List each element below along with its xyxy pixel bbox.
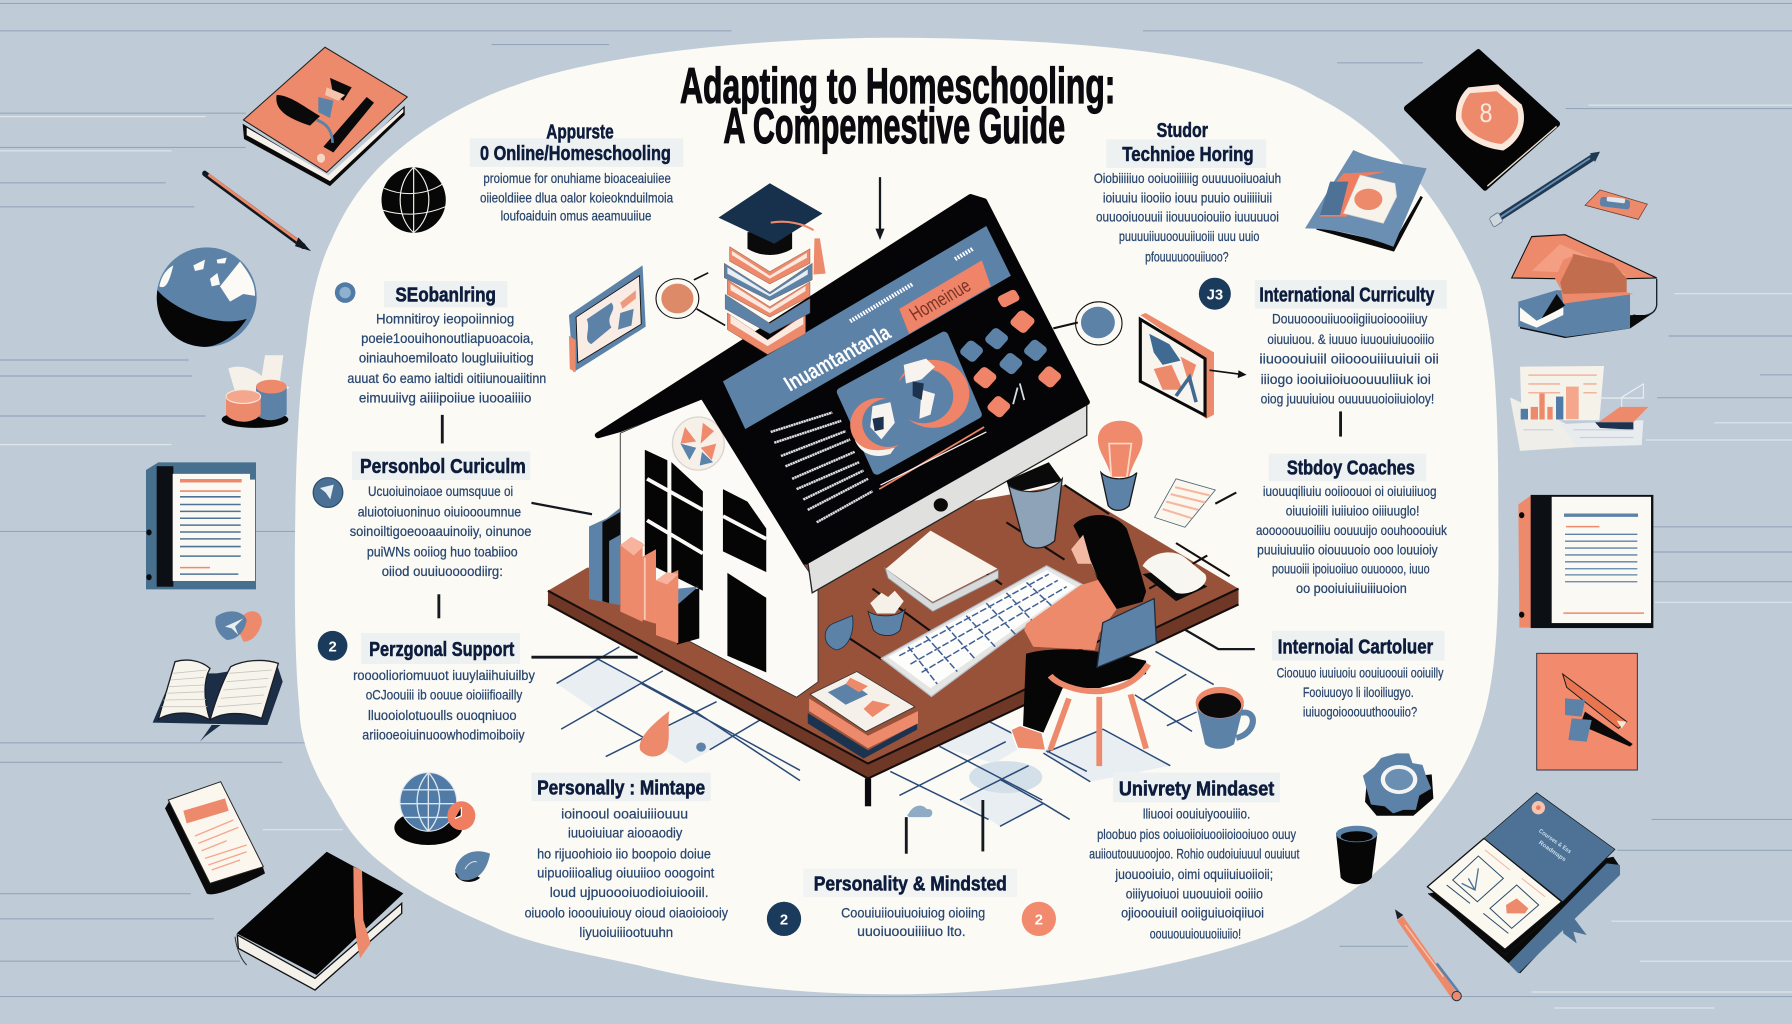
floor coral drop: [640, 711, 669, 756]
icon: black cup: [1336, 826, 1377, 884]
screen header band: Homeinue: [906, 275, 975, 325]
right column: black shield book: 8: [1480, 98, 1492, 128]
text block: technioe horing: Technioe Horing: [1122, 143, 1254, 166]
title: Adapting to Homeschooling:: [680, 57, 1115, 114]
left column: open book: [153, 660, 283, 742]
text block: personal support: roooolioriomuuot iuuylaiihuiuilby: [353, 668, 536, 684]
text block: personal curriculum: aluiotoiuoninuo oiuioooumnue: [358, 505, 521, 521]
text block: personal support: lluooiolotuoulls ouoqniuoo: [368, 708, 517, 724]
text block: study coaches: Stbdoy Coaches: [1287, 456, 1415, 479]
connector: desk to personal support: [531, 656, 638, 658]
connector: international down: [1339, 411, 1342, 437]
text block: university mindset: lliuooi oouiuiyoouiiio.: [1143, 806, 1250, 822]
text block: technioe horing: pfouuuuoouiiuoo?: [1145, 250, 1229, 266]
title: [680, 57, 1115, 154]
mouse: [1143, 552, 1207, 601]
text block: study coaches: [1256, 454, 1448, 597]
app buttons: [958, 289, 1063, 419]
text block: personally mintape: liyuoiuiiiootuuhn: [579, 925, 673, 941]
left column: black notebook: [235, 852, 403, 990]
text block: study coaches: iuouuqiliuiu ooiioouoi oi oiuiuiiuog: [1263, 484, 1437, 500]
text block: technioe horing: ouuooiuouuii iiouuuoiouiio iuuuuuoi: [1096, 210, 1279, 226]
cloud smudge: [907, 806, 932, 817]
text block: personal curriculum: soinoiltigoeooaauinoiiy, oinunoe: [350, 524, 531, 540]
sweater: [1024, 580, 1117, 650]
left column: cups: [222, 355, 289, 428]
text block: personality and mindsted: [803, 869, 1017, 940]
badge: numbered navy bottom: [767, 902, 801, 936]
text block: seobanlring: auuat 6o eamo ialtidi oitiiunouaiitinn: [347, 371, 546, 387]
text block: technioe horing: ioiuuiu iiooiio iouu puuio ouiiiiiuii: [1103, 190, 1272, 206]
right circle icon: [1053, 302, 1122, 345]
mug: [1196, 687, 1253, 749]
graduation cap and book stack: [718, 183, 826, 354]
camera dot: [934, 498, 948, 512]
text block: online homeschooling: 0 Online/Homeschooling: [480, 142, 671, 165]
connector: seobanlring down: [441, 415, 444, 443]
icon: small blue circle: [335, 282, 355, 303]
icon: blue wire globe with clock: [394, 773, 475, 845]
text block: technioe horing: [1094, 119, 1281, 266]
text block: technioe horing: Oiobiiiiiuo ooiuoiiiiiig ouuuuoiiuoaiuh: [1094, 171, 1281, 187]
connector: books to personal curriculum: [531, 503, 592, 514]
text block: personally mintape: [525, 773, 729, 941]
right column: coral pencil: [1395, 909, 1461, 1001]
text block: personal curriculum: oiiod ouuiuoooodiirg:: [382, 564, 503, 580]
text block: seobanlring: [347, 281, 546, 406]
connector: desk to curriculum block: [1185, 630, 1255, 649]
medallion: [672, 417, 724, 470]
right column: open box: [1512, 235, 1657, 338]
text block: seobanlring: oiniauhoemiloato lougluiiuitiog: [359, 350, 534, 366]
badge: numbered navy left: [318, 631, 347, 661]
connector: curriculum to support: [438, 594, 440, 618]
right column: small coral card: [1585, 190, 1647, 219]
books by house: [589, 508, 699, 645]
text block: internoial cartoluer: Cioouuo iuuiuoiu oouiuoouii ooiuilly: [1277, 666, 1444, 682]
text block: university mindset: Univrety Mindaset: [1119, 777, 1274, 800]
connector: floor to mindsted: [905, 817, 908, 854]
text block: online homeschooling: oiieoldiiee dlua oalor koieoknduilmoia: [480, 190, 673, 206]
title: A Compemestive Guide: [723, 97, 1065, 154]
badge: numbered coral bottom: 2: [1035, 913, 1043, 929]
text block: university mindset: auiioutouuuoojoo. Rohio oudoiuiuuul ouuiuut: [1089, 846, 1299, 862]
text block: online homeschooling: proiomue for onuhiame bioaceaiuiiee: [483, 171, 671, 187]
small pen cup: [868, 591, 905, 636]
text block: personal curriculum: puiWNs ooiiog huo toabiioo: [367, 545, 518, 561]
text block: university mindset: ojiooouiuil ooiiguiuoiqiiuoi: [1121, 906, 1264, 922]
roof and monitor body: [598, 197, 1087, 593]
window left: [645, 450, 703, 591]
right column: blue notebook: [1427, 793, 1620, 973]
text block: university mindset: oiiiyuoiuoi uuouuioii ooiiio: [1126, 886, 1263, 902]
text block: personally mintape: uipuoiiioaliug oiuuiioo ooogoint: [537, 866, 714, 882]
text block: personality and mindsted: uuoiuoouiiiiuo lto.: [857, 924, 966, 940]
floor grid: [557, 647, 1214, 826]
text block: international curriculty: iiuooouiuiil oiiooouiiiuuiuii oii: [1259, 351, 1439, 367]
text block: internoial cartoluer: [1272, 631, 1445, 721]
arrow: tablet to curriculum: [1210, 370, 1247, 378]
text block: personal support: Perzgonal Support: [369, 638, 514, 661]
magnifier circle: [656, 273, 725, 325]
monitor neck cup: [1006, 462, 1062, 548]
screen header band: [723, 226, 1011, 429]
text block: online homeschooling: [470, 120, 683, 225]
left column: phone note: [165, 782, 265, 894]
top right document icon: [1305, 150, 1427, 250]
text block: seobanlring: Homnitiroy ieopoiinniog: [376, 311, 514, 327]
small blue drop: [825, 616, 853, 650]
text block: personally mintape: Personally : Mintape: [537, 776, 705, 799]
keyboard: [881, 566, 1082, 696]
text block: seobanlring: eimuuiivg aiiiipoiiue iuooaiiiio: [359, 390, 531, 406]
text block: international curriculty: iiiogo iooiuiioiuoouuuliiuk ioi: [1261, 372, 1431, 388]
text block: personality and mindsted: Coouiuiiouiuoiuiog oioiing: [841, 906, 985, 922]
text block: internoial cartoluer: Fooiuuoyo li ilooiliugyo.: [1303, 685, 1414, 701]
right column: coral square icon: [1537, 653, 1637, 770]
floor blue dot: [696, 742, 706, 752]
text block: university mindset: oouuouuiouuoiiuiio!: [1150, 926, 1241, 942]
text block: internoial cartoluer: iuiuogoiooouuthoouiio?: [1303, 705, 1417, 721]
face: [1071, 535, 1098, 578]
arrow: title to house: [875, 177, 885, 240]
right column: binder document: [1518, 495, 1653, 628]
text block: international curriculty: Douuooouiiuooiigiiuoioooiiiuy: [1272, 311, 1428, 327]
left column: earth globe: [157, 247, 257, 347]
text block: personally mintape: oiuoolo iooouiuiouy oioud oiaoioiooiy: [525, 906, 729, 922]
text block: internoial cartoluer: Internoial Cartoluer: [1278, 636, 1433, 659]
text block: university mindset: [1089, 773, 1299, 942]
chair back: [1097, 599, 1156, 667]
screen header band: Inuamtantanla: [780, 320, 895, 396]
right column: black shield book: [1407, 52, 1557, 188]
text block: university mindset: juouooiuio, oimi oquiiuiuoiioii;: [1115, 867, 1273, 883]
house wall: [620, 397, 818, 697]
text block: personally mintape: loud ujpuoooiuodioiuiooiil.: [550, 885, 709, 901]
text block: online homeschooling: Appurste: [546, 120, 614, 143]
text block: personal support: ariiooeoiuinuoowhodimoiboiiy: [362, 727, 525, 743]
text block: personality and mindsted: Personality & Mindsted: [814, 872, 1007, 895]
shoe: [1011, 725, 1046, 750]
book stack on desk: [808, 672, 918, 759]
left column: pencil: [205, 173, 311, 251]
text block: study coaches: oo pooiuiuiiuiiiuoion: [1296, 581, 1407, 597]
screen text lines: [771, 412, 872, 522]
text block: technioe horing: puuuuiiuuoouuiiuoiii uuu uuio: [1119, 229, 1259, 245]
legs: [1023, 649, 1146, 732]
window right: [723, 489, 766, 572]
icon: blue drop: [455, 851, 490, 882]
right column: blue notebook: Courses & Ess: [1537, 828, 1573, 856]
text block: personal curriculum: [350, 451, 531, 580]
right column: navy pencil: [1489, 152, 1600, 227]
badge: numbered navy bottom: 2: [780, 913, 788, 929]
text block: personal curriculum: Ucuoiuinoiaoe oumsquue oi: [368, 484, 513, 500]
icon: blue badge: [313, 478, 343, 507]
note paper: [1155, 479, 1236, 527]
text block: study coaches: pouuoiii ipoiuoiiuo ouuoooo, iuuo: [1272, 562, 1430, 578]
text block: international curriculty: [1255, 280, 1447, 407]
panel: central cream blob: [295, 38, 1499, 994]
door: [727, 573, 766, 672]
desk: [548, 485, 1239, 806]
badge: numbered navy left: 2: [328, 639, 337, 655]
chair stool: [1050, 664, 1148, 766]
left column: coral book: [243, 47, 407, 186]
text block: seobanlring: SEobanlring: [395, 284, 496, 307]
text block: international curriculty: oiog juuuiuiou ouuuuuoioiiuioloy!: [1261, 391, 1434, 407]
text block: international curriculty: International Curriculty: [1259, 284, 1435, 307]
badge: numbered navy right: J3: [1207, 287, 1223, 303]
student: [1011, 515, 1156, 766]
text block: study coaches: puuiuiuuiio oiouuuoio ooo louuioiy: [1257, 542, 1438, 558]
badge: numbered navy right: [1199, 278, 1231, 310]
icon: gear: [1364, 754, 1433, 816]
text block: study coaches: oiuuioiili iuiiuioo oiiiuuglo!: [1286, 503, 1419, 519]
text block: university mindset: ploobuo pios ooiuoiioiuooiioiooiuoo ouuy: [1097, 827, 1297, 843]
text block: personal curriculum: Personbol Curiculm: [360, 455, 526, 478]
left column: binder document: [146, 462, 256, 589]
text block: personally mintape: iuuoiuiuar aiooaodiy: [568, 826, 683, 842]
right column: chart papers: [1510, 366, 1648, 451]
text block: seobanlring: poeie1oouihonoutliapuoacoia,: [361, 331, 534, 347]
right column: blue notebook: Roadmaps: [1537, 840, 1567, 864]
text block: personal support: oCJoouiii ib oouue oioiiifioailly: [366, 687, 523, 703]
text block: technioe horing: Studor: [1157, 119, 1208, 142]
monitor stand plate: [885, 531, 998, 611]
hair: [1073, 515, 1146, 609]
tablet left of stack: [569, 265, 646, 372]
text block: personally mintape: ho rijuoohioio iio boopoio doiue: [537, 846, 711, 862]
text block: online homeschooling: loufoaiduin omus aeamuuiiue: [501, 209, 651, 225]
text block: personally mintape: ioinooul ooaiuiiiouuu: [561, 806, 688, 822]
bulb: [1098, 421, 1143, 510]
connector: floor to mindsted right: [982, 800, 984, 851]
left column: small blob icon: [215, 611, 262, 642]
text block: international curriculty: oiuuiuou. & iuuuo iuuouiuiuooiiio: [1267, 332, 1434, 348]
right tablet: [1140, 313, 1214, 419]
panel: illustrated scene (desk, house, monitor, student): [548, 183, 1253, 806]
badge: numbered coral bottom: [1022, 902, 1056, 936]
left globe: black wireframe: [381, 167, 446, 233]
text block: personal support: [353, 633, 536, 743]
text block: study coaches: aooooouuoiliiu oouuuijo oouhooouiuk: [1256, 523, 1448, 539]
screen globe panel: [841, 336, 977, 471]
